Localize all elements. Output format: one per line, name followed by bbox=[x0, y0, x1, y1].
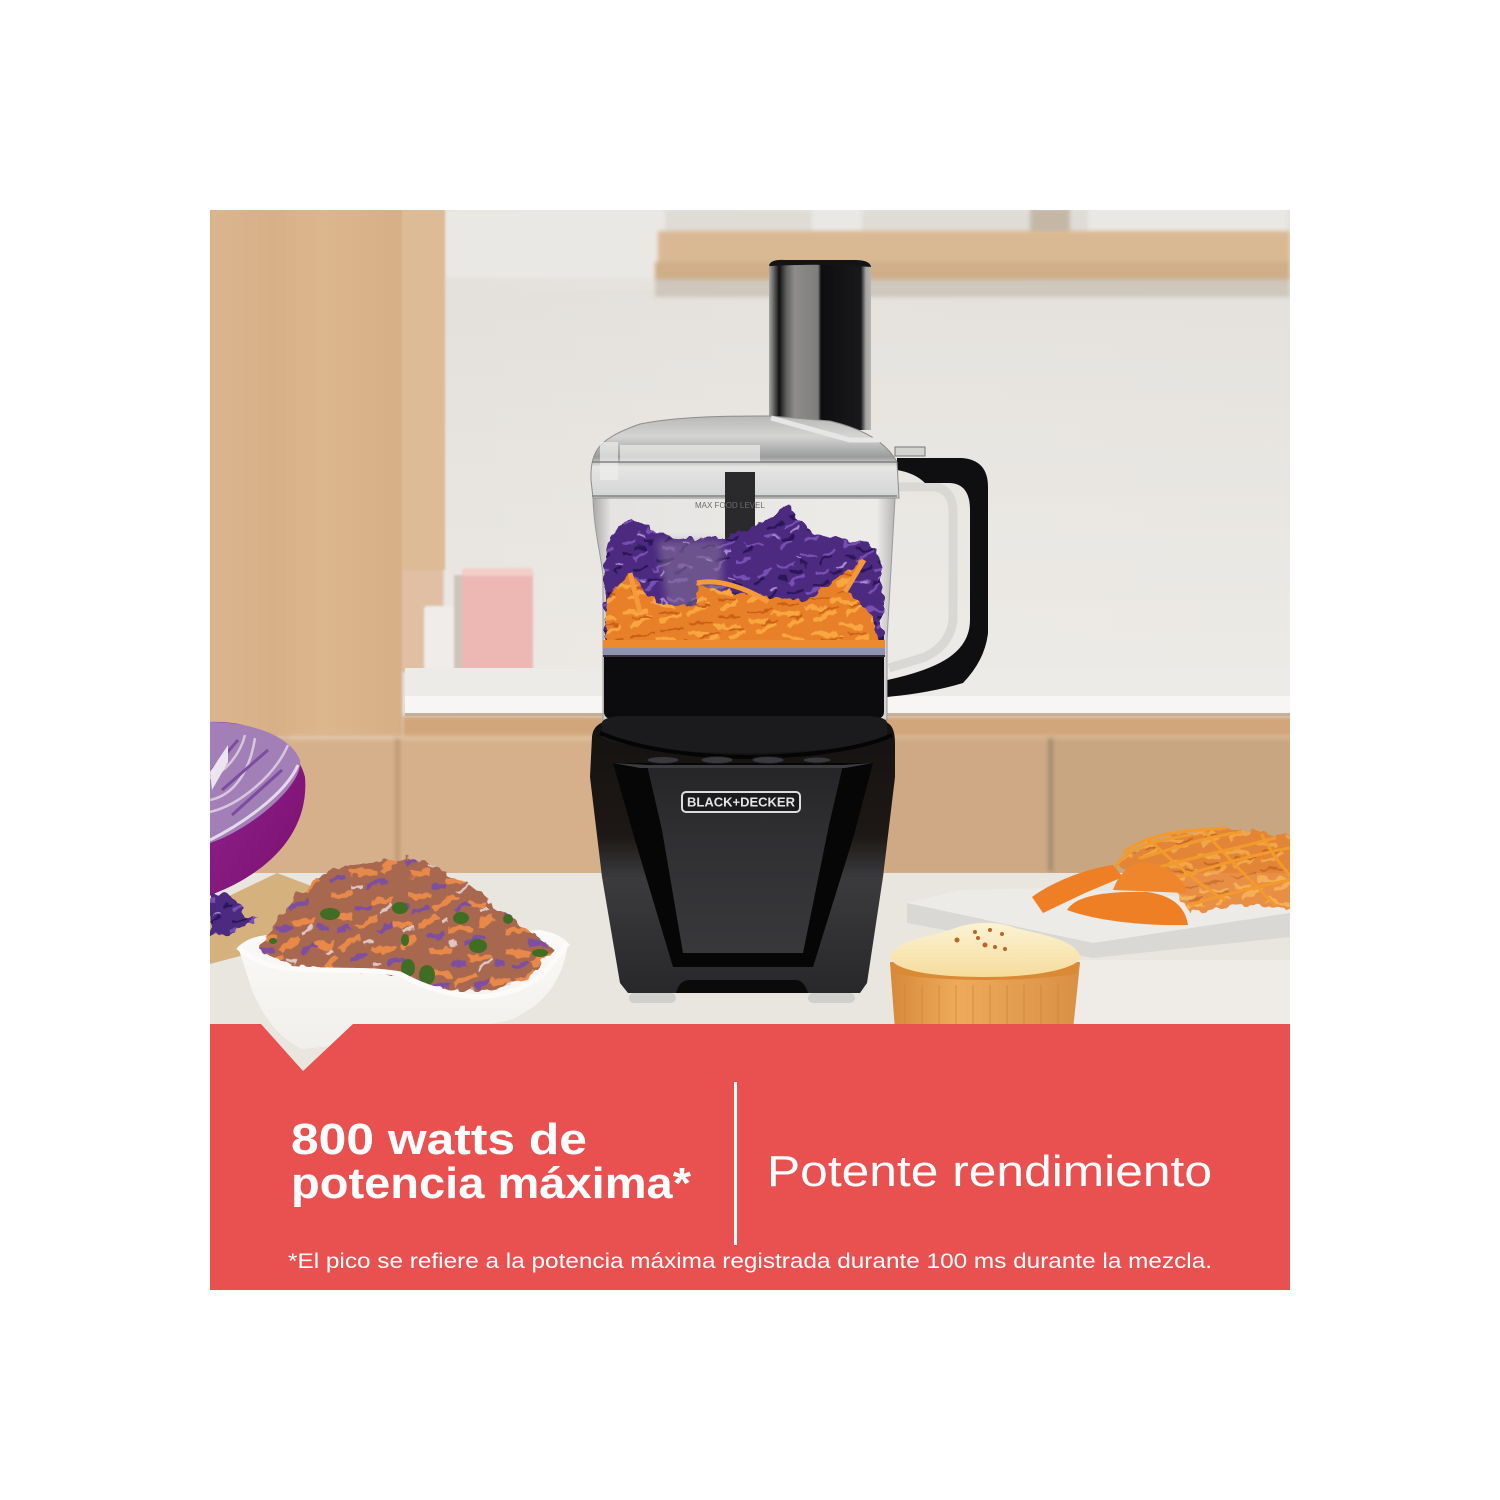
misty cabbage reflection bbox=[657, 540, 723, 610]
carrot wedges bbox=[1032, 862, 1188, 925]
lower cabinets bbox=[205, 716, 1295, 877]
bowl front rim bbox=[238, 943, 568, 997]
bowl dark bottom bbox=[604, 657, 884, 720]
food processor bbox=[590, 260, 988, 1003]
glossy band bbox=[613, 763, 873, 967]
wooden board bbox=[210, 873, 310, 964]
handle bbox=[887, 458, 988, 697]
jar collar ring bbox=[603, 648, 885, 657]
feed tube bbox=[769, 260, 871, 430]
shredded carrot pile bbox=[1116, 828, 1295, 912]
jar bbox=[593, 498, 895, 720]
blurred top shelf items bbox=[447, 210, 1086, 276]
headline: potencia máxima* bbox=[291, 1159, 692, 1208]
sauce ramekin bbox=[890, 923, 1081, 1030]
max food level label: MAX FOOD LEVEL bbox=[695, 501, 765, 510]
wall background bbox=[278, 210, 1290, 738]
divider bbox=[734, 1082, 737, 1245]
shredded carrot bbox=[603, 560, 885, 650]
base lower slot bbox=[676, 980, 808, 993]
coleslaw bbox=[260, 857, 553, 991]
subheading: Potente rendimiento bbox=[767, 1147, 1212, 1196]
control buttons bbox=[647, 756, 831, 764]
blade stem bbox=[725, 472, 755, 542]
parsley bbox=[269, 902, 548, 985]
red caption band bbox=[210, 1024, 1290, 1290]
photo panel: kitchen scene bbox=[205, 205, 1295, 1090]
collar bbox=[602, 716, 887, 753]
cabbage half bbox=[210, 722, 305, 936]
marble board bbox=[907, 903, 1290, 958]
headline: 800 watts de bbox=[291, 1115, 587, 1164]
rubber feet bbox=[629, 993, 855, 1003]
tall wooden cabinet bbox=[205, 205, 445, 737]
wall shelf bbox=[655, 231, 1290, 297]
footnote: *El pico se refiere a la potencia máxima registrada durante 100 ms durante la mezcla. bbox=[288, 1250, 1212, 1273]
brand badge: BLACK+DECKER bbox=[687, 794, 796, 810]
brand badge bbox=[682, 792, 800, 812]
motor base bbox=[590, 716, 895, 1003]
lid bbox=[591, 416, 925, 498]
shredded cabbage pile bbox=[210, 893, 260, 936]
front panel bbox=[647, 765, 843, 953]
front counter bbox=[210, 873, 1290, 1083]
counter back bbox=[405, 668, 1290, 716]
purple cabbage bbox=[605, 507, 882, 645]
pink canister and white bottle bbox=[424, 568, 533, 673]
salad bowl bbox=[238, 857, 568, 1049]
